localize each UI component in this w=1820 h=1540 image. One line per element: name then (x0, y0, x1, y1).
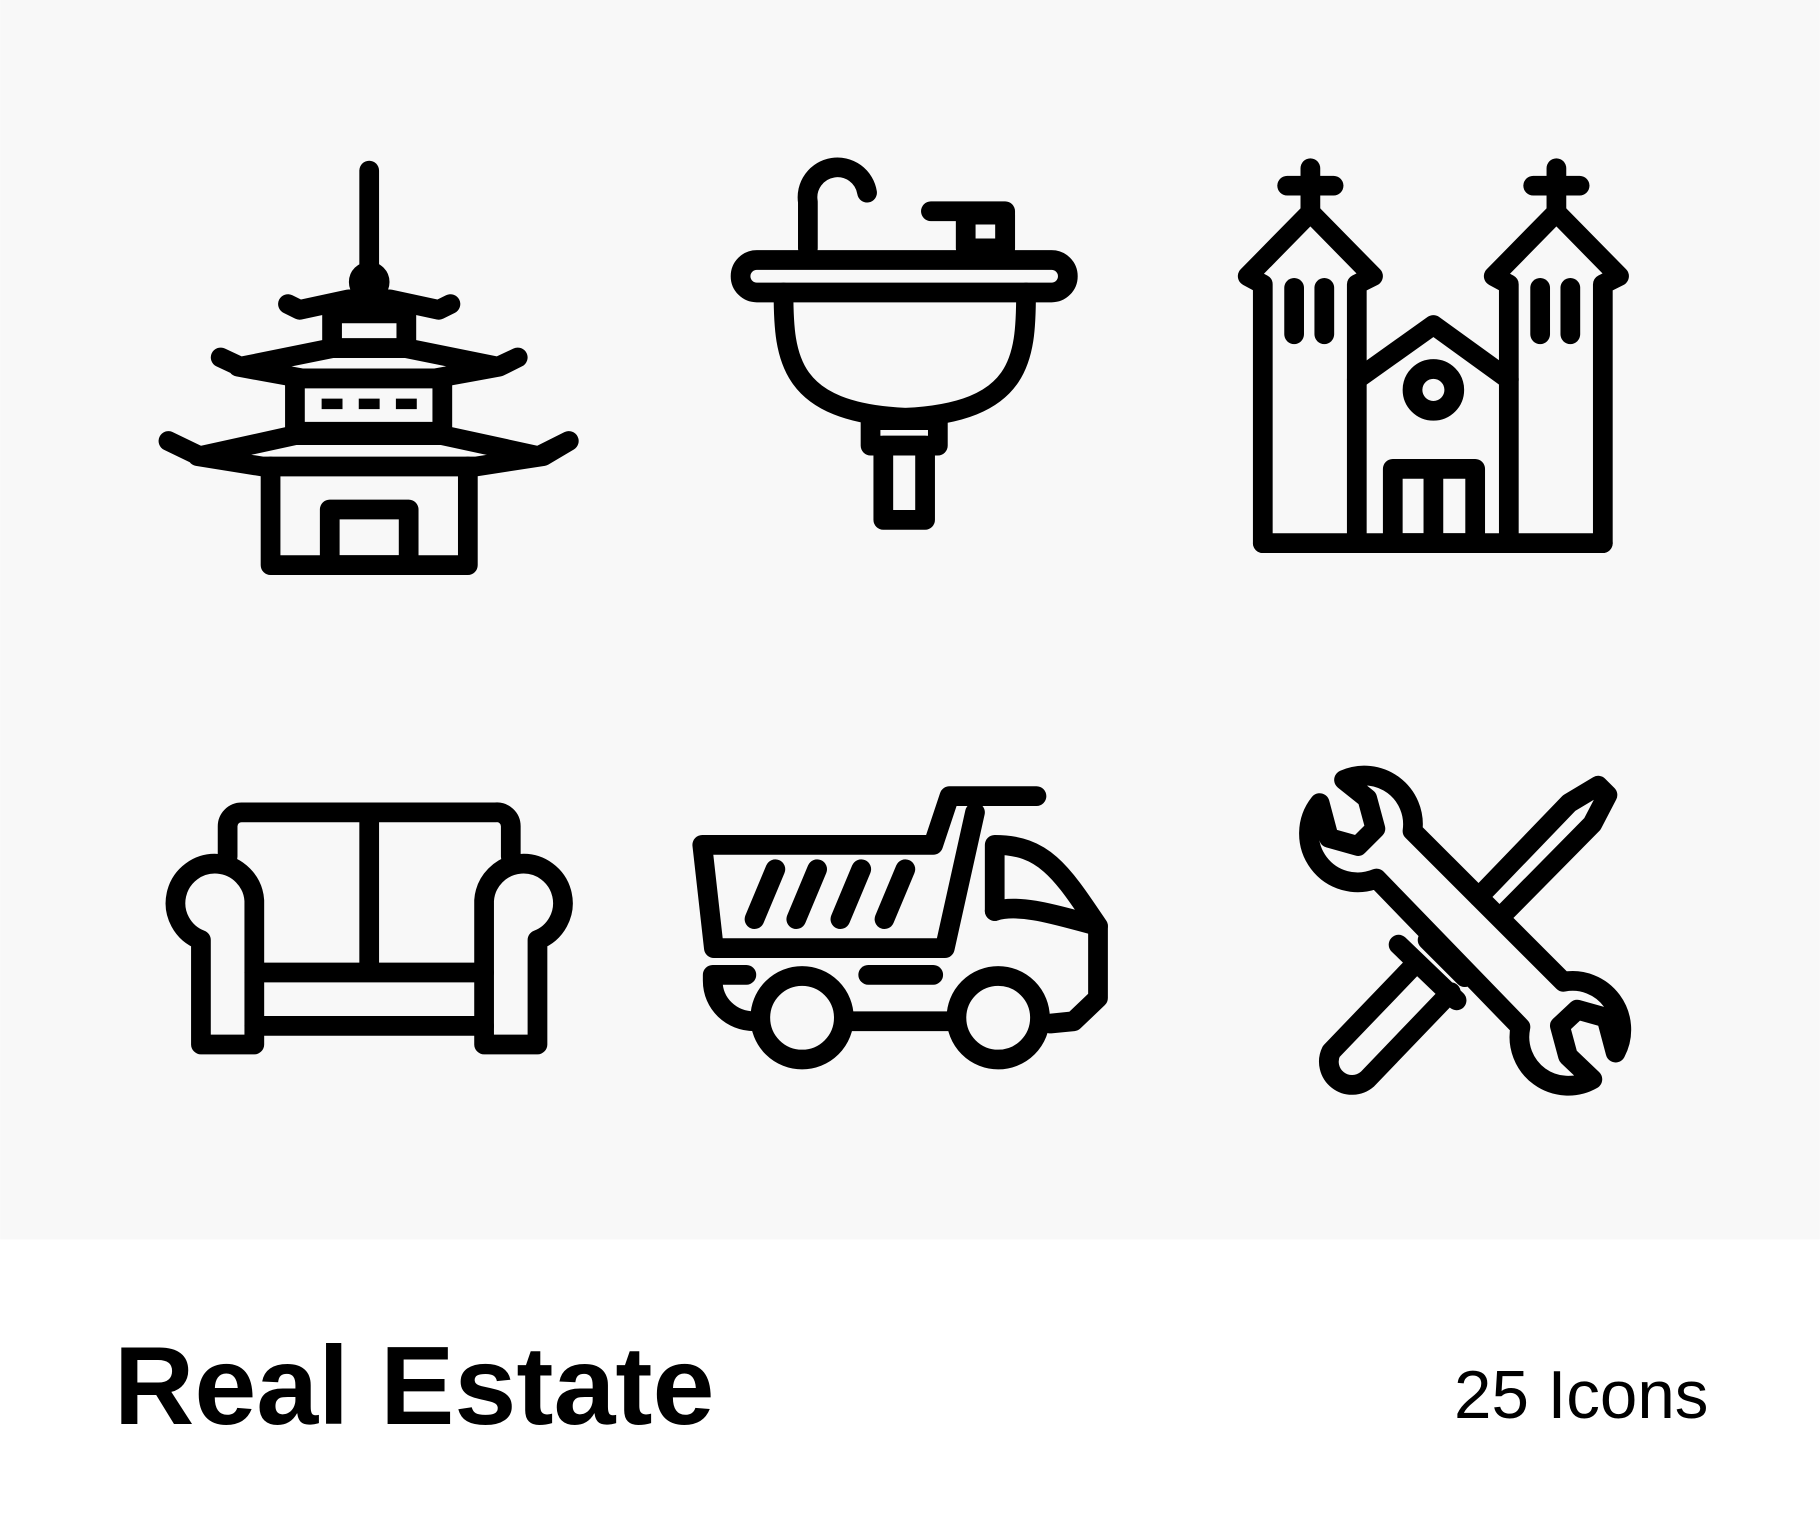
icon: sofa (175, 812, 563, 1044)
icon: dump truck (702, 796, 1098, 1060)
icon count: 25 Icons (1454, 1358, 1708, 1433)
icon: tools (1309, 775, 1621, 1086)
icon: pagoda (168, 171, 569, 565)
icon: church (1248, 168, 1619, 543)
icon: sink (741, 167, 1068, 520)
title: Real Estate (114, 1323, 714, 1448)
